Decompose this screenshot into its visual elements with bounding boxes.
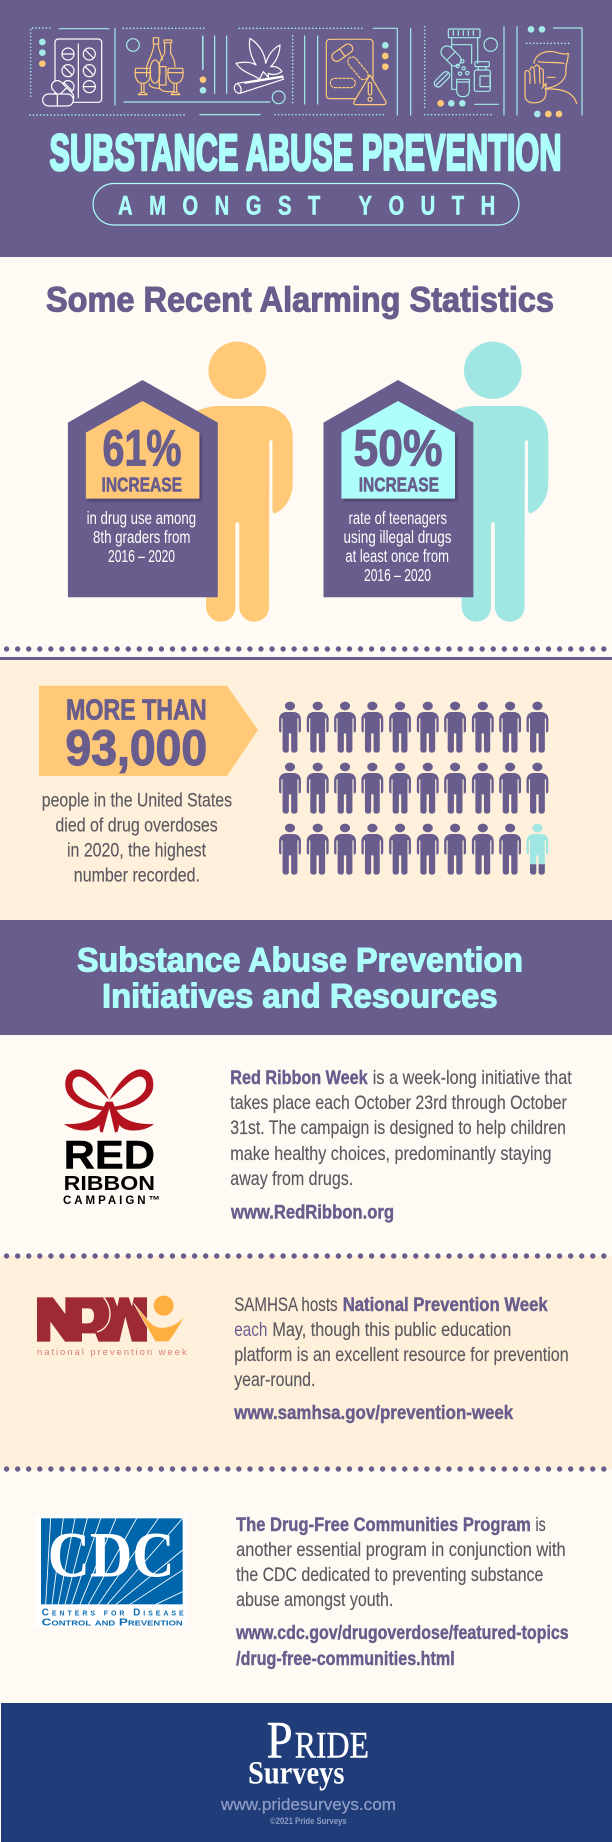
description: 2016 – 2020 bbox=[108, 546, 175, 566]
copyright: ©2021 Pride Surveys bbox=[270, 1816, 347, 1826]
logo: Pride Surveys bbox=[248, 1712, 369, 1791]
link: www.RedRibbon.org bbox=[230, 1201, 394, 1223]
description bbox=[87, 508, 196, 566]
description: 2016 – 2020 bbox=[364, 565, 431, 585]
value: 50% bbox=[354, 420, 442, 477]
logo: Pride Surveys: Surveys bbox=[248, 1755, 345, 1791]
description: the CDC dedicated to preventing substance bbox=[236, 1564, 543, 1586]
logo: national prevention week: national prevention week bbox=[37, 1347, 187, 1358]
description: make healthy choices, predominantly staying bbox=[230, 1143, 552, 1165]
label: INCREASE bbox=[102, 475, 182, 497]
description: 8th graders from bbox=[93, 527, 190, 547]
house panel bbox=[324, 380, 473, 597]
panel: alarming statistics bbox=[46, 281, 554, 622]
panel: initiatives heading: Substance Abuse Prevention bbox=[77, 942, 523, 980]
logo: red ribbon campaign bbox=[63, 1069, 160, 1207]
description: away from drugs. bbox=[230, 1168, 353, 1190]
description bbox=[42, 790, 232, 887]
logo: CDC: CDC bbox=[48, 1520, 175, 1592]
stat card: 50% bbox=[324, 342, 548, 622]
logo: CDC: Centers for Disease bbox=[42, 1608, 184, 1619]
description bbox=[236, 1514, 566, 1611]
description: National Prevention Week bbox=[343, 1294, 548, 1316]
stat card: 61% bbox=[68, 342, 293, 622]
icon: capsules with warning sign bbox=[305, 28, 397, 115]
logo: red ribbon campaign: RIBBON bbox=[64, 1172, 155, 1195]
logo: red ribbon campaign: CAMPAIGN™ bbox=[63, 1195, 160, 1207]
panel: overdose statistic bbox=[0, 660, 612, 920]
description: rate of teenagers bbox=[348, 508, 447, 528]
logo: Pride Surveys: RIDE bbox=[295, 1726, 369, 1767]
website: www.pridesurveys.com bbox=[220, 1795, 396, 1814]
description: died of drug overdoses bbox=[55, 815, 218, 837]
panel: initiatives heading: Initiatives and Resources bbox=[102, 977, 498, 1015]
description bbox=[234, 1294, 569, 1391]
description: people in the United States bbox=[42, 790, 232, 812]
description: year-round. bbox=[234, 1369, 315, 1391]
panel: footer bbox=[1, 1703, 612, 1842]
heading: statistics: Some Recent Alarming Statistics bbox=[46, 281, 554, 320]
panel: drug-free communities bbox=[36, 1514, 569, 1670]
logo: CDC bbox=[36, 1516, 187, 1628]
description: number recorded. bbox=[74, 865, 200, 887]
description: Red Ribbon Week bbox=[230, 1067, 368, 1089]
pictogram chart bbox=[279, 702, 548, 875]
logo: red ribbon campaign: RED bbox=[64, 1133, 155, 1177]
label: INCREASE bbox=[359, 475, 439, 497]
description bbox=[344, 508, 452, 585]
value: 61% bbox=[102, 420, 182, 477]
link: /drug-free-communities.html bbox=[236, 1648, 455, 1670]
arrow banner bbox=[39, 686, 258, 776]
subtitle pill: AMONGST YOUTH bbox=[118, 191, 495, 221]
link bbox=[235, 1622, 569, 1670]
panel: national prevention week bbox=[0, 1256, 612, 1469]
logo: Pride Surveys: P bbox=[267, 1712, 293, 1770]
description: using illegal drugs bbox=[344, 527, 452, 547]
icon: person raising hand bbox=[517, 26, 582, 117]
logo: CDC: Control and Prevention bbox=[42, 1617, 183, 1628]
link: www.samhsa.gov/prevention-week bbox=[233, 1402, 513, 1424]
description: The Drug-Free Communities Program bbox=[236, 1514, 531, 1536]
description: each bbox=[234, 1319, 267, 1341]
icon: orange person bbox=[187, 342, 293, 622]
description: abuse amongst youth. bbox=[236, 1589, 393, 1611]
description: May, though this public education bbox=[272, 1319, 511, 1341]
description: is a week-long initiative that bbox=[373, 1067, 572, 1089]
icon: alcohol bottles and glasses bbox=[123, 28, 270, 102]
icon: pill bottle and vial bbox=[411, 27, 504, 115]
description: in drug use among bbox=[87, 508, 196, 528]
description: at least once from bbox=[345, 546, 449, 566]
description: SAMHSA hosts bbox=[234, 1294, 338, 1316]
subtitle pill bbox=[93, 184, 519, 225]
description bbox=[230, 1067, 572, 1190]
logo: national prevention week bbox=[37, 1296, 187, 1358]
arrow banner: MORE THAN bbox=[66, 694, 207, 726]
icon: pill blister pack bbox=[30, 28, 187, 115]
panel: initiatives heading bbox=[0, 920, 612, 1035]
icon: cannabis leaf and joint bbox=[200, 28, 385, 115]
panel: red ribbon week bbox=[63, 1067, 572, 1223]
house panel bbox=[68, 380, 218, 597]
arrow banner: 93,000 bbox=[66, 720, 207, 776]
description: in 2020, the highest bbox=[67, 840, 206, 862]
description: is bbox=[536, 1514, 546, 1536]
icon: teal person bbox=[443, 342, 548, 622]
panel: header bbox=[0, 0, 612, 257]
